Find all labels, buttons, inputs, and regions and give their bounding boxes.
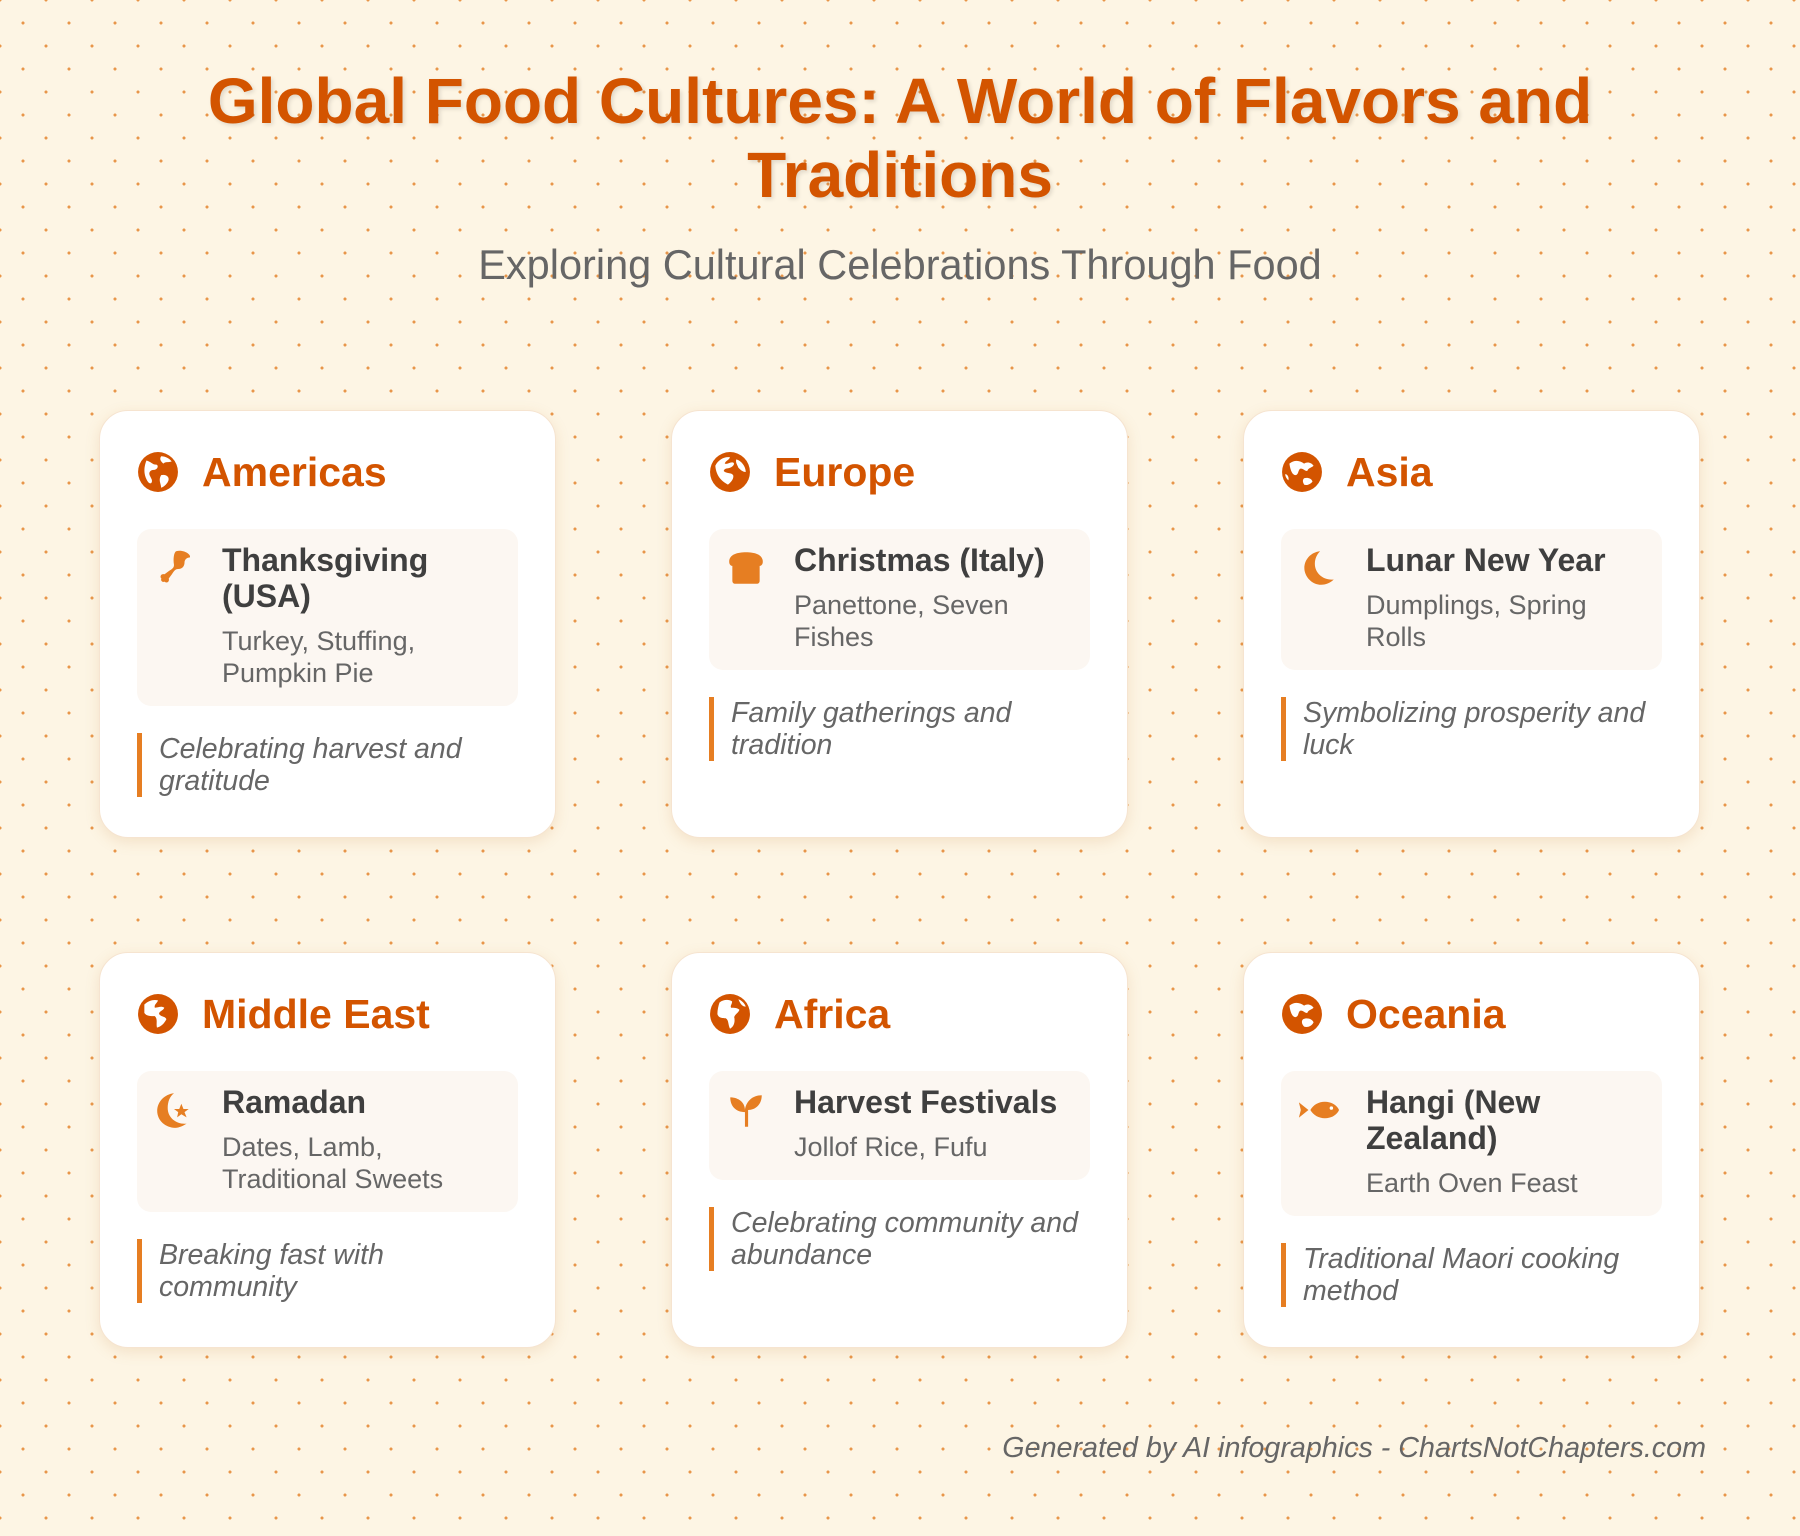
event: Hangi: Hangi (New Zealand) <box>1366 1084 1540 1156</box>
event: Ramadan <box>137 1071 518 1212</box>
description <box>137 1239 518 1303</box>
heading: Europe: Europe <box>774 448 915 494</box>
heading: Europe <box>710 448 915 494</box>
event: Harvest Festivals: Jollof Rice, Fufu <box>794 1132 988 1162</box>
panel: Europe <box>671 410 1128 838</box>
event: Lunar New Year <box>1281 529 1662 670</box>
heading: Middle East: Middle East <box>202 990 430 1036</box>
description: Breaking fast with community <box>159 1239 384 1303</box>
panel: Oceania <box>1243 952 1700 1348</box>
title: Traditions <box>747 139 1053 211</box>
panel: Africa <box>671 952 1128 1348</box>
panel: Americas <box>99 410 556 838</box>
event: Harvest Festivals: Harvest Festivals <box>794 1084 1057 1120</box>
event: Christmas Italy <box>709 529 1090 670</box>
heading: Oceania: Oceania <box>1346 990 1506 1036</box>
event: Hangi: Earth Oven Feast <box>1366 1168 1578 1198</box>
event: Lunar New Year: Dumplings, Spring Rolls <box>1366 590 1587 652</box>
footer credit: Generated by AI infographics - ChartsNotChapters.com <box>1002 1432 1706 1464</box>
event: Ramadan: Dates, Lamb, Traditional Sweets <box>222 1132 443 1194</box>
description: Celebrating harvest and gratitude <box>159 733 462 797</box>
heading: Asia <box>1282 448 1433 494</box>
event: Hangi <box>1281 1071 1662 1216</box>
event: Christmas Italy: Christmas (Italy) <box>794 542 1045 578</box>
heading: Africa: Africa <box>774 990 890 1036</box>
card grid <box>95 410 1704 1356</box>
description: Symbolizing prosperity and luck <box>1303 697 1645 761</box>
event: Thanksgiving: Turkey, Stuffing, Pumpkin Pie <box>222 626 415 688</box>
event: Harvest Festivals <box>709 1071 1090 1180</box>
subtitle: Exploring Cultural Celebrations Through Food <box>478 241 1322 288</box>
title: Global Food Cultures: A World of Flavors and <box>208 65 1592 137</box>
description: Traditional Maori cooking method <box>1303 1243 1619 1307</box>
heading: Americas: Americas <box>202 448 387 494</box>
heading: Asia: Asia <box>1346 448 1433 494</box>
event: Lunar New Year: Lunar New Year <box>1366 542 1606 578</box>
event: Ramadan: Ramadan <box>222 1084 366 1120</box>
event: Thanksgiving: Thanksgiving (USA) <box>222 542 428 614</box>
panel: Middle East <box>99 952 556 1348</box>
panel: Asia <box>1243 410 1700 838</box>
heading: Africa <box>710 990 890 1036</box>
description: Family gatherings and tradition <box>731 697 1011 761</box>
event: Christmas Italy: Panettone, Seven Fishes <box>794 590 1009 652</box>
event: Thanksgiving <box>137 529 518 706</box>
description: Celebrating community and abundance <box>731 1207 1078 1271</box>
title <box>208 65 1592 211</box>
